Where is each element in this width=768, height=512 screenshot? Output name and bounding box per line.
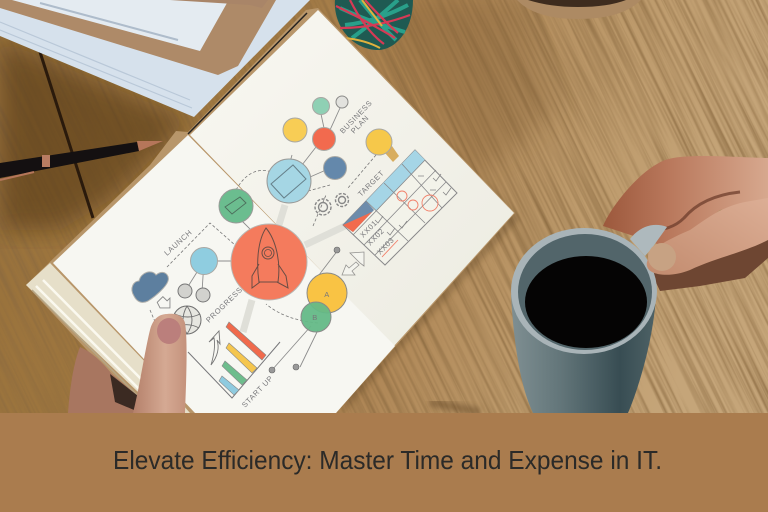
- shadow under book: [110, 374, 138, 410]
- caption band: [0, 413, 768, 512]
- arrow: cloud to globe: [156, 294, 175, 313]
- icon: light bulb: [366, 129, 399, 162]
- left page: [53, 135, 395, 413]
- upper white papers: [12, 0, 227, 51]
- right hand thumb: [647, 198, 768, 275]
- end dots: [269, 247, 340, 373]
- node: light blue: [190, 248, 218, 274]
- binder edge: [188, 13, 307, 134]
- sketch labels: LAUNCH: [162, 228, 194, 257]
- node: teal: [312, 98, 330, 114]
- coffee: [525, 256, 647, 348]
- page stack: [26, 263, 190, 413]
- cover: [26, 8, 515, 413]
- node: gray: [336, 96, 348, 108]
- node: tablet: [267, 159, 311, 203]
- node: folder: [219, 189, 253, 223]
- thumb nail: [157, 318, 181, 344]
- node: A: [307, 273, 347, 313]
- double arrows: [342, 252, 364, 275]
- table header: [366, 150, 425, 211]
- small gray nodes: [178, 284, 210, 302]
- node: yellow: [283, 118, 307, 142]
- thumb nail: [648, 243, 676, 271]
- caption text: Elevate Efficiency: Master Time and Expense in IT.: [113, 445, 662, 475]
- table marks: [382, 191, 438, 257]
- sketch labels: TARGET: [356, 168, 386, 198]
- sketch labels: START UP: [240, 374, 275, 409]
- book shadow: [320, 14, 520, 416]
- node: red: [312, 128, 336, 150]
- sketch labels: BUSINESS: [338, 98, 374, 135]
- bowl: [517, 0, 641, 19]
- sketch labels: XX01: [358, 218, 379, 239]
- yarn ball: [335, 0, 413, 50]
- table pie swatch: [343, 201, 374, 232]
- hand holding book: [68, 314, 187, 413]
- sketch labels: PROGRESS: [204, 285, 244, 324]
- node: rocket: [231, 224, 307, 300]
- knuckle crease: [652, 192, 740, 229]
- arrow: growth: [209, 331, 220, 365]
- mug interior: [518, 234, 652, 350]
- fingers: [603, 156, 768, 245]
- sketch labels: PLAN: [349, 113, 371, 135]
- table: [343, 150, 457, 265]
- palm: [68, 347, 138, 413]
- connector bands: [243, 205, 345, 332]
- node: A: A: [324, 290, 330, 299]
- gears: [315, 194, 348, 215]
- sketch labels: [162, 98, 396, 409]
- thumb: [133, 314, 187, 413]
- notebook: [26, 8, 520, 416]
- palm shadow: [650, 235, 768, 291]
- infographic sketch: [132, 96, 457, 409]
- node: dark blue: [324, 156, 346, 180]
- bar chart: [188, 322, 280, 398]
- icon: cloud: [132, 272, 168, 302]
- kraft folder: [0, 0, 276, 75]
- right page: [190, 10, 514, 346]
- node: B: [301, 302, 331, 332]
- sketch labels: XX03: [375, 235, 396, 256]
- node: B: B: [312, 313, 318, 322]
- dashed links: [150, 155, 376, 324]
- mug handle: [630, 225, 667, 256]
- mug: [511, 225, 667, 413]
- hand holding mug: [603, 156, 768, 291]
- paper stack: [0, 0, 310, 117]
- sketch labels: XX02: [365, 226, 386, 247]
- pen: [0, 141, 163, 180]
- connector lines: [187, 108, 340, 370]
- icon: globe: [173, 306, 201, 334]
- mug rim: [511, 228, 657, 354]
- mug body: [511, 295, 656, 413]
